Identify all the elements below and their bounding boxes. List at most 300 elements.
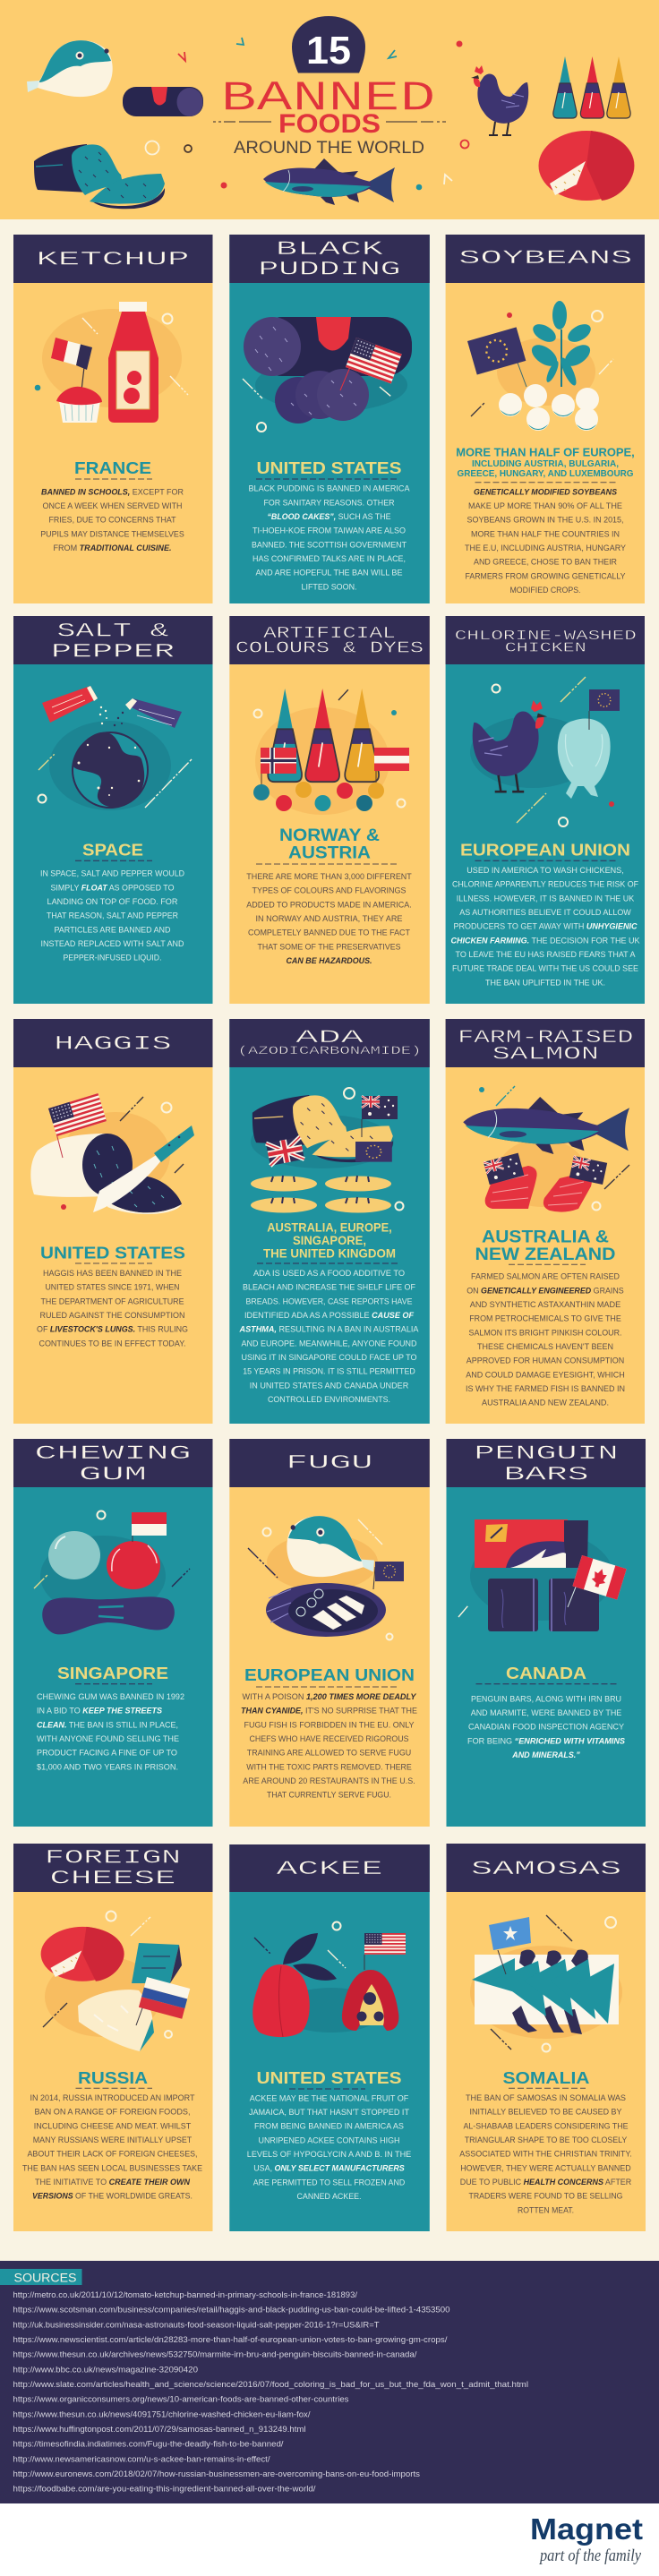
body text: UNITED STATES SINCE 1971, WHEN (45, 1283, 179, 1292)
divider (289, 2088, 365, 2090)
panel header (13, 235, 213, 283)
body text (249, 484, 410, 591)
body text: AND ARE HOPEFUL THE BAN WILL BE (256, 569, 403, 578)
body text: PUPILS MAY DISTANCE THEMSELVES (40, 529, 184, 538)
body text: MAKE UP MORE THAN 90% OF ALL THE (468, 501, 622, 510)
body text: AND COULD DAMAGE EYESIGHT, WHICH (466, 1370, 625, 1379)
panel title: GUM (79, 1463, 147, 1485)
country: Australia, Europe, Singapore, UK: AUSTRALIA, EUROPE, (267, 1220, 392, 1234)
panel header (229, 1844, 430, 1892)
panel background (13, 1019, 213, 1424)
body text: BLACK PUDDING IS BANNED IN AMERICA (249, 484, 410, 493)
panel background (13, 235, 213, 603)
panel header (229, 1019, 430, 1067)
panel: samosas (446, 1844, 646, 2231)
panel: ketchup (13, 235, 213, 603)
body text: ON GENETICALLY ENGINEERED GRAINS (466, 1286, 624, 1295)
illustration: ackee (252, 1921, 406, 2037)
divider (256, 863, 398, 865)
body text: AND SYNTHETIC ASTAXANTHIN MADE (470, 1300, 620, 1309)
panel background (229, 1439, 430, 1827)
body text: LEVELS OF HYPOGLYCIN A AND B. IN THE (247, 2150, 411, 2159)
body text: MANY RUSSIANS WERE INITIALLY UPSET (33, 2135, 193, 2144)
illustration: penguin bars (458, 1519, 627, 1631)
body text: FROM TRADITIONAL CUISINE. (54, 543, 172, 552)
body text: BLEACH AND INCREASE THE SHELF LIFE OF (243, 1283, 415, 1292)
country: United States: UNITED STATES (256, 2069, 401, 2087)
panel header (446, 1439, 646, 1487)
body text (247, 2093, 411, 2201)
divider (75, 1262, 152, 1264)
body text: HAGGIS HAS BEEN BANNED IN THE (43, 1269, 182, 1278)
source links: https://www.huffingtonpost.com/2011/07/29/samosas-banned_n_913249.html (13, 2425, 305, 2435)
body text (465, 487, 626, 595)
body text: IN A BID TO KEEP THE STREETS (37, 1707, 163, 1716)
country: Norway and Austria: AUSTRIA (288, 843, 371, 863)
body text: TRAINING ARE ALLOWED TO SERVE FUGU (247, 1749, 411, 1758)
source links: http://www.euronews.com/2018/02/07/how-russian-businessmen-are-overcoming-bans-on-eu-food-imports (13, 2469, 420, 2479)
panel background (446, 616, 645, 1004)
body text: IDENTIFIED ADA AS A POSSIBLE CAUSE OF (244, 1311, 414, 1320)
body text: THERE ARE MORE THAN 3,000 DIFFERENT (246, 872, 412, 881)
source links: https://timesofindia.indiatimes.com/Fugu-the-deadly-fish-to-be-banned/ (13, 2440, 284, 2450)
panel title (51, 620, 175, 663)
country: Russia: RUSSIA (78, 2069, 148, 2087)
body text: ABOUT THEIR LACK OF FOREIGN CHEESES, (27, 2150, 197, 2159)
divider (75, 860, 152, 861)
body text: AND GREECE, CHOSE TO BAN THEIR (474, 558, 617, 567)
panel title: CHEESE (50, 1867, 175, 1889)
panel title: CHICKEN (505, 641, 586, 656)
body text (40, 869, 184, 963)
panel: ackee (229, 1844, 430, 2231)
body text: CANADIAN FOOD INSPECTION AGENCY (468, 1723, 624, 1732)
icon: pufferfish (27, 40, 113, 97)
body text: FUTURE TRADE DEAL WITH THE US COULD SEE (452, 964, 638, 973)
body text (467, 1694, 626, 1759)
panel title: BLACK (276, 238, 384, 261)
illustration: salt, pepper and planet (38, 686, 192, 810)
body text: THE BAN HAS SEEN LOCAL BUSINESSES TAKE (22, 2163, 202, 2172)
body text (459, 2093, 632, 2214)
body text: JAMAICA, BUT THAT HASN'T STOPPED IT (249, 2108, 409, 2117)
country: Space: SPACE (82, 842, 143, 860)
illustration: soybeans (467, 301, 613, 431)
body text: LANDING ON TOP OF FOOD. FOR (47, 897, 178, 906)
illustration: cheeses (41, 1911, 190, 2051)
body text: 15 YEARS IN PRISON. IT IS STILL PERMITTED (243, 1367, 415, 1376)
source links: https://www.newscientist.com/article/dn28283-more-than-half-of-european-union-votes-to-ban-growing-gm-crops/ (13, 2335, 448, 2345)
panel background (229, 616, 430, 1004)
body text: BANNED IN SCHOOLS, EXCEPT FOR (41, 487, 184, 496)
panel title (238, 1028, 421, 1057)
panel header (446, 235, 645, 283)
divider (75, 2087, 152, 2089)
panel title: CHLORINE-WASHED (455, 629, 637, 644)
panel: ADA (229, 1019, 430, 1424)
body text: ACKEE MAY BE THE NATIONAL FRUIT OF (250, 2093, 409, 2102)
panel: foreign cheese (13, 1844, 213, 2231)
panel header (446, 616, 645, 664)
source links (13, 2290, 528, 2495)
body text: TI-HOEH-KOE FROM TAIWAN ARE ALSO (252, 526, 406, 535)
source links: https://www.thesun.co.uk/archives/news/532750/marmite-irn-bru-and-penguin-biscuits-banned-in-canada/ (13, 2350, 417, 2360)
panel: fugu (229, 1439, 430, 1827)
title rules (213, 121, 446, 123)
panel header (13, 1844, 213, 1892)
country: Australia, Europe, Singapore, UK (263, 1220, 396, 1261)
body text: CHEWING GUM WAS BANNED IN 1992 (37, 1692, 184, 1701)
panel: artificial colours and dyes (229, 616, 430, 1004)
body text: INSTEAD REPLACED WITH SALT AND (41, 939, 184, 948)
illustration: dye bottles (253, 689, 409, 815)
panel background (446, 1844, 646, 2231)
decorative dots (220, 41, 462, 190)
body text: USED IN AMERICA TO WASH CHICKENS, (466, 866, 624, 875)
country: more than half of Europe (456, 446, 635, 479)
body text: SIMPLY FLOAT AS OPPOSED TO (50, 883, 174, 892)
body text (40, 487, 184, 552)
icon: salmon (263, 158, 395, 205)
body text: FROM BEING BANNED IN AMERICA AS (254, 2122, 404, 2131)
body text: AND MARMITE, WERE BANNED BY THE (471, 1708, 621, 1717)
country: European Union: EUROPEAN UNION (460, 842, 630, 860)
body text: TRADERS WERE FOUND TO BE SELLING (469, 2192, 623, 2201)
body text (246, 872, 412, 965)
body text: AND EUROPE. MEANWHILE, ANYONE FOUND (242, 1339, 417, 1348)
panel: black pudding (229, 235, 430, 603)
body text: VERSIONS OF THE WORLDWIDE GREATS. (32, 2192, 193, 2201)
panel header (229, 1439, 430, 1487)
badge: 15: 15 (306, 29, 351, 73)
body text: THE DEPARTMENT OF AGRICULTURE (41, 1297, 184, 1305)
country: United States: UNITED STATES (40, 1245, 185, 1262)
badge: 15 (292, 16, 365, 73)
panel header (13, 1019, 213, 1067)
body text: FROM PETROCHEMICALS TO GIVE THE (469, 1314, 621, 1323)
body text (37, 1269, 188, 1348)
panel: farm-raised salmon (446, 1019, 645, 1424)
body text: LIFTED SOON. (301, 582, 356, 591)
body text: $1,000 AND TWO YEARS IN PRISON. (37, 1762, 178, 1771)
body text: PARTICLES ARE BANNED AND (54, 925, 171, 934)
footer background (0, 2503, 659, 2576)
country: more than half of Europe: MORE THAN HALF OF EUROPE, (456, 446, 635, 458)
body text: ASSOCIATED WITH THE CHRISTIAN TRINITY. (459, 2150, 632, 2159)
divider (509, 1263, 586, 1265)
body text: IN 2014, RUSSIA INTRODUCED AN IMPORT (30, 2093, 195, 2102)
panel background (446, 1019, 645, 1424)
body text: COMPLETELY BANNED DUE TO THE FACT (248, 929, 410, 937)
body text: BAN ON A RANGE OF FOREIGN FOODS, (34, 2108, 190, 2117)
body text: OF LIVESTOCK'S LUNGS. THIS RULING (37, 1325, 188, 1334)
panel title: (AZODICARBONAMIDE) (238, 1044, 421, 1057)
illustration: fugu (248, 1516, 404, 1640)
divider (509, 2087, 586, 2089)
sources tab (0, 2269, 82, 2285)
divider (476, 1683, 618, 1685)
body text: FOR SANITARY REASONS. OTHER (263, 498, 395, 507)
divider (257, 1262, 398, 1264)
panel title (34, 1442, 192, 1485)
panel title: FOREIGN (45, 1847, 181, 1870)
body text (239, 1269, 419, 1404)
panel title: ARTIFICIAL (263, 625, 396, 643)
country: France: FRANCE (74, 459, 151, 477)
body text: PENGUIN BARS, ALONG WITH IRN BRU (471, 1694, 621, 1703)
body text: FARMED SALMON ARE OFTEN RAISED (471, 1272, 620, 1281)
panel title: SAMOSAS (471, 1858, 621, 1880)
source links: http://uk.businessinsider.com/nasa-astronauts-food-season-liquid-salt-pepper-2016-1?r=US&IR=T (13, 2320, 380, 2330)
country: more than half of Europe: GREECE, HUNGARY, AND LUXEMBOURG (457, 468, 634, 479)
panel title: COLOURS & DYES (235, 639, 424, 657)
header background (0, 0, 659, 219)
body text: FARMERS FROM GROWING GENETICALLY (466, 571, 625, 580)
body text: AL-SHABAAB LEADERS CONSIDERING THE (464, 2121, 629, 2130)
panel header (229, 235, 430, 283)
body text (451, 866, 640, 987)
illustration: salmon and fillets (463, 1086, 629, 1212)
panel title: ADA (295, 1028, 364, 1048)
body text: ONCE A WEEK WHEN SERVED WITH (43, 501, 183, 510)
title: foods: FOODS (278, 109, 381, 139)
source links: https://www.thesun.co.uk/news/4091751/chlorine-washed-chicken-eu-liam-fox/ (13, 2409, 311, 2419)
panel header (13, 616, 213, 664)
body text: CAN BE HAZARDOUS. (287, 956, 372, 965)
divider (256, 1686, 398, 1688)
body text: BREADS. HOWEVER, CASE REPORTS HAVE (245, 1297, 412, 1305)
sources tab: SOURCES (14, 2271, 77, 2284)
body text: THAN CYANIDE, IT'S NO SURPRISE THAT THE (241, 1707, 417, 1716)
logo: Magnet: part of the family (538, 2546, 641, 2565)
panel title (475, 1442, 618, 1485)
divider (256, 478, 398, 480)
body text (22, 2093, 202, 2201)
body text: MODIFIED CROPS. (510, 586, 580, 595)
body text: FRIES, DUE TO CONCERNS THAT (48, 516, 176, 525)
country: more than half of Europe: INCLUDING AUSTRIA, BULGARIA, (472, 458, 619, 469)
body text: INITIALLY BELIEVED TO BE CAUSED BY (469, 2108, 621, 2117)
panel background (446, 235, 645, 603)
body text: CHEFS WHO HAVE RECEIVED RIGOROUS (249, 1734, 408, 1743)
country: Australia, Europe, Singapore, UK: THE UNITED KINGDOM (263, 1246, 396, 1261)
panel title: SOYBEANS (458, 247, 632, 270)
body text: IS WHY THE FARMED FISH IS BANNED IN (466, 1384, 625, 1393)
country: Australia, Europe, Singapore, UK: SINGAPORE, (293, 1233, 366, 1247)
title: banned: BANNED (220, 75, 435, 124)
source links: http://www.slate.com/articles/health_and_science/science/2016/07/food_coloring_is_bad_for_us_but_the_fda_won_t_admit_that.html (13, 2380, 528, 2390)
body text (241, 1692, 417, 1800)
panel: chlorine-washed chicken (446, 616, 645, 1004)
panel header (446, 1844, 646, 1892)
body text: CONTROLLED ENVIRONMENTS. (268, 1395, 390, 1404)
panel background (446, 1439, 646, 1827)
illustration: black pudding (243, 317, 412, 432)
panel header (13, 1439, 213, 1487)
body text (37, 1692, 184, 1771)
icon: hen (471, 65, 528, 135)
body text: THESE CHEMICALS HAVEN'T BEEN (477, 1342, 613, 1351)
divider (75, 478, 152, 480)
panel: sources (0, 2261, 659, 2503)
body text: TYPES OF COLOURS AND FLAVORINGS (252, 886, 407, 895)
panel: penguin bars (446, 1439, 646, 1827)
panel title: HAGGIS (54, 1032, 172, 1055)
header banner (0, 0, 659, 219)
body text: “BLOOD CAKES”, SUCH AS THE (267, 512, 390, 521)
body text: THAT REASON, SALT AND PEPPER (47, 911, 178, 920)
icon: black pudding (123, 87, 203, 116)
body text: ARE AROUND 20 RESTAURANTS IN THE U.S. (243, 1776, 415, 1785)
source links: http://www.bbc.co.uk/news/magazine-32090420 (13, 2365, 198, 2375)
panel header (446, 1019, 645, 1067)
panel title (45, 1847, 181, 1889)
body text: AUSTRALIA AND NEW ZEALAND. (482, 1399, 609, 1408)
panel title: PENGUIN (475, 1442, 618, 1465)
country: Norway and Austria (279, 826, 380, 863)
country: Australia and New Zealand (475, 1228, 616, 1264)
country: Singapore: SINGAPORE (57, 1665, 168, 1682)
body text: TRIANGULAR SHAPE TO BE TOO CLOSELY (465, 2135, 627, 2144)
country: Somalia: SOMALIA (503, 2069, 589, 2087)
panel title: BARS (503, 1463, 589, 1485)
panel background (229, 235, 430, 603)
source links: https://www.organicconsumers.org/news/10-american-foods-are-banned-other-countries (13, 2395, 349, 2405)
panel background (13, 1844, 213, 2231)
body text: TO LEAVE THE EU HAS RAISED FEARS THAT A (455, 950, 636, 959)
body text: ILLNESS. HOWEVER, IT IS BANNED IN THE UK (457, 894, 635, 903)
body text: MORE THAN HALF THE COUNTRIES IN (471, 529, 620, 538)
source links: http://www.newsamericasnow.com/u-s-ackee-ban-remains-in-effect/ (13, 2454, 270, 2464)
illustration: chewing gum (34, 1511, 190, 1634)
panel: chewing gum (13, 1439, 213, 1827)
panel title (458, 1028, 633, 1065)
panel background (229, 1019, 430, 1424)
panel title: KETCHUP (36, 249, 190, 271)
panel title: FUGU (287, 1452, 372, 1475)
body text: PRODUCT FACING A FINE OF UP TO (37, 1749, 177, 1758)
divider (75, 1683, 152, 1685)
body text: CONTINUES TO BE IN EFFECT TODAY. (39, 1339, 186, 1348)
panel title: SALMON (492, 1044, 599, 1065)
country: Australia and New Zealand: AUSTRALIA & (482, 1228, 609, 1246)
panel title (455, 629, 637, 656)
source links: https://www.scotsman.com/business/companies/retail/haggis-and-black-pudding-us-ban-could-be-lifted-1-4353500 (13, 2306, 450, 2315)
country: Canada: CANADA (506, 1665, 586, 1682)
body text: FOR BEING “ENRICHED WITH VITAMINS (467, 1736, 626, 1745)
panel title: FARM-RAISED (458, 1028, 633, 1048)
body text: PRODUCERS TO GET AWAY WITH UNHYGIENIC (453, 922, 638, 931)
body text: WITH THE TOXIC PARTS REMOVED. THERE (246, 1762, 412, 1771)
panel: haggis (13, 1019, 213, 1424)
panel: soybeans (446, 235, 645, 603)
icon: cheese wheel (539, 131, 634, 201)
body text: ROTTEN MEAT. (518, 2205, 574, 2214)
body text: PEPPER-INFUSED LIQUID. (63, 954, 161, 963)
body text: BANNED. THE SCOTTISH GOVERNMENT (252, 540, 407, 549)
panel: salt and pepper (13, 616, 213, 1004)
panel title (235, 625, 424, 657)
source links: http://metro.co.uk/2011/10/12/tomato-ketchup-banned-in-primary-schools-in-france-181893/ (13, 2290, 357, 2300)
body text: IN SPACE, SALT AND PEPPER WOULD (40, 869, 184, 878)
illustration: haggis (30, 1093, 194, 1214)
body text: USA, ONLY SELECT MANUFACTURERS (253, 2164, 406, 2173)
body text: RULED AGAINST THE CONSUMPTION (39, 1311, 184, 1320)
logo: Magnet: Magnet (530, 2512, 643, 2546)
body text: THE BAN UPLIFTED IN THE UK. (485, 978, 605, 987)
body text: ADA IS USED AS A FOOD ADDITIVE TO (253, 1269, 405, 1278)
icon: loaf of bread (34, 144, 165, 209)
icon: colour bottles (553, 56, 630, 118)
panel background (229, 1844, 430, 2231)
body text: ADDED TO PRODUCTS MADE IN AMERICA. (246, 900, 412, 909)
body text: ASTHMA, RESULTING IN A BAN IN AUSTRALIA (239, 1325, 419, 1334)
panel title (258, 238, 401, 281)
panel title: PEPPER (51, 640, 175, 663)
body text: AND MINERALS.” (511, 1750, 580, 1759)
source links: https://foodbabe.com/are-you-eating-this-ingredient-banned-all-over-the-world/ (13, 2485, 316, 2495)
panel title: PUDDING (258, 259, 401, 281)
body text: IN NORWAY AND AUSTRIA, THEY ARE (256, 914, 403, 923)
illustration: ketchup (35, 302, 188, 423)
country: United States: UNITED STATES (256, 459, 401, 477)
body text: CANNED ACKEE. (297, 2192, 362, 2201)
illustration: chickens (470, 677, 620, 826)
panel title: SALT & (57, 620, 168, 643)
logo: Magnet (530, 2512, 643, 2565)
illustration: bread and flags (251, 1088, 403, 1212)
body text: ARE PERMITTED TO SELL FROZEN AND (253, 2178, 406, 2187)
body text: FUGU FISH IS FORBIDDEN IN THE EU. ONLY (244, 1720, 414, 1729)
body text: HAS CONFIRMED TALKS ARE IN PLACE, (252, 554, 406, 563)
divider (475, 860, 617, 861)
panel title: ACKEE (276, 1858, 383, 1880)
country: Norway and Austria: NORWAY & (279, 826, 380, 845)
body text: IN UNITED STATES AND CANADA UNDER (250, 1381, 409, 1390)
body text: GENETICALLY MODIFIED SOYBEANS (474, 487, 618, 496)
body text: THE BAN OF SAMOSAS IN SOMALIA WAS (466, 2093, 626, 2102)
country: Australia and New Zealand: NEW ZEALAND (475, 1245, 616, 1264)
body text: AS AUTHORITIES BELIEVE IT COULD ALLOW (459, 908, 631, 917)
title: around the world: AROUND THE WORLD (234, 138, 424, 158)
divider (475, 482, 617, 484)
body text: UNRIPENED ACKEE CONTAINS HIGH (258, 2135, 399, 2144)
body text: THE INITIATIVE TO CREATE THEIR OWN (35, 2178, 190, 2187)
body text: THAT SOME OF THE PRESERVATIVES (258, 942, 401, 951)
body text: CHICKEN FARMING. THE DECISION FOR THE UK (451, 936, 640, 945)
body text: THAT CURRENTLY SERVE FUGU. (267, 1791, 391, 1800)
body text: HOWEVER, THEY WERE ACTUALLY BANNED (460, 2163, 631, 2172)
body text: USING IT IN SINGAPORE COULD FACE UP TO (242, 1353, 417, 1362)
body text: APPROVED FOR HUMAN CONSUMPTION (466, 1356, 624, 1365)
country: European Union: EUROPEAN UNION (244, 1666, 415, 1684)
body text: SALMON ITS BRIGHT PINKISH COLOUR. (469, 1328, 621, 1337)
sources background (0, 2261, 659, 2503)
panel header (229, 616, 430, 664)
panel background (13, 616, 213, 1004)
body text: WITH A POISON 1,200 TIMES MORE DEADLY (242, 1692, 416, 1701)
body text: SOYBEANS GROWN IN THE U.S. IN 2015, (467, 516, 623, 525)
decorative marks (145, 38, 469, 184)
body text (466, 1272, 625, 1408)
panel title: CHEWING (34, 1442, 192, 1465)
body text: INCLUDING CHEESE AND MEAT. WHILST (34, 2121, 192, 2130)
body text: WITH ANYONE FOUND SELLING THE (37, 1734, 179, 1743)
body text: DUE TO PUBLIC HEALTH CONCERNS AFTER (460, 2178, 632, 2187)
body text: THE E.U, INCLUDING AUSTRIA, HUNGARY (465, 543, 626, 552)
body text: CHLORINE APPARENTLY REDUCES THE RISK OF (452, 880, 638, 889)
panel background (13, 1439, 213, 1827)
